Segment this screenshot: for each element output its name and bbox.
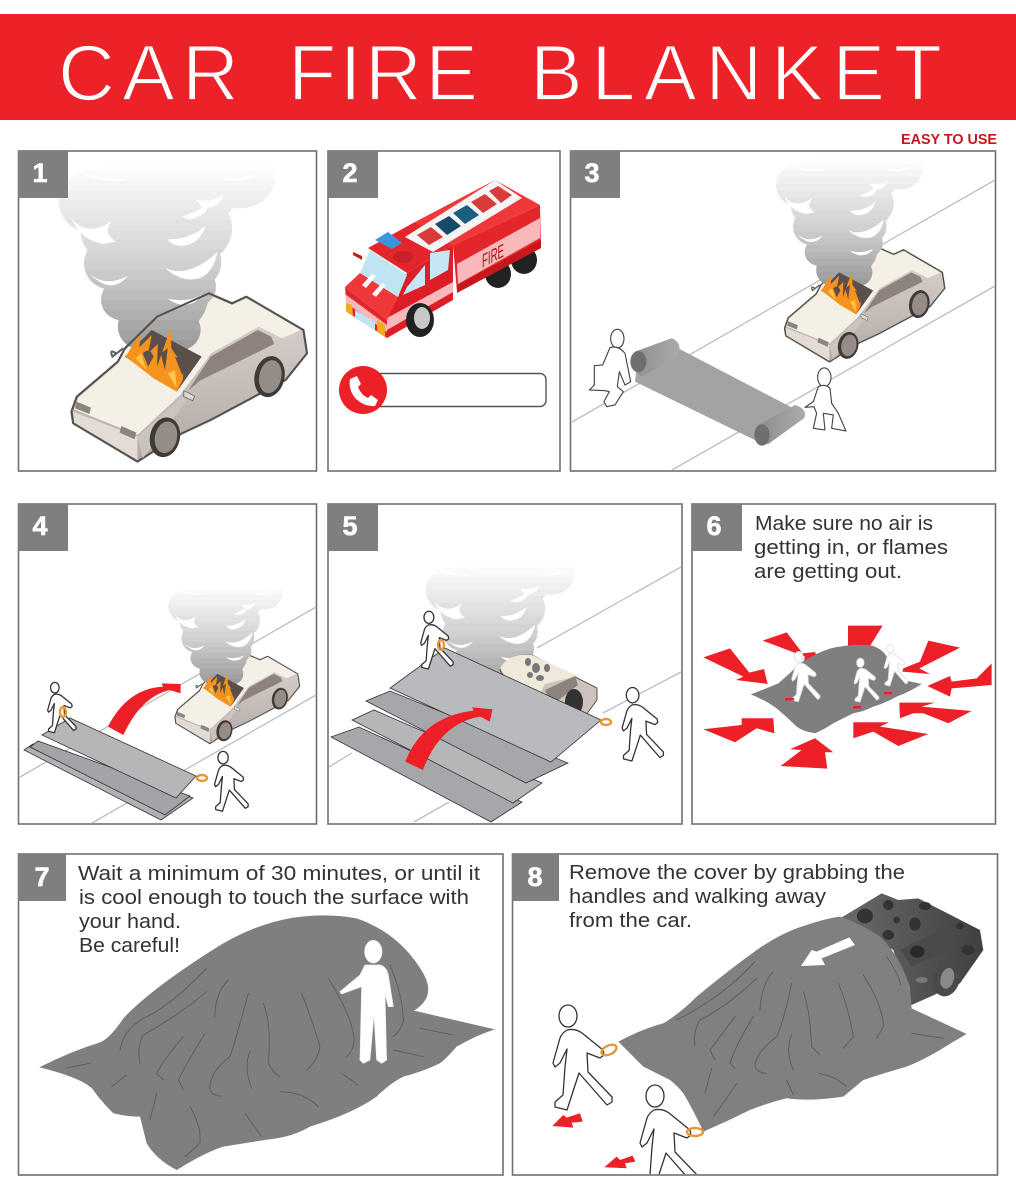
walker right — [622, 688, 663, 761]
white direction arrow — [801, 937, 855, 966]
person touching blanket — [340, 940, 393, 1063]
badge 6: 6 — [706, 511, 722, 541]
badge 3 — [570, 151, 620, 198]
instruction text — [78, 863, 480, 957]
folded blanket — [24, 718, 196, 820]
badge 2 — [328, 151, 378, 198]
unfolding blanket — [331, 648, 601, 822]
instruction text — [754, 513, 948, 583]
panel 2: call fire service — [328, 151, 560, 471]
badge 5: 5 — [342, 511, 358, 541]
instruction text: Be careful! — [79, 935, 180, 957]
road — [572, 180, 995, 470]
blanket folds — [677, 957, 943, 1117]
badge 1: 1 — [32, 158, 48, 188]
smoke and car — [36, 160, 307, 462]
title: CAR — [58, 28, 239, 117]
badge 2: 2 — [342, 158, 358, 188]
walker 1 — [553, 1005, 612, 1110]
red arrow — [108, 683, 181, 735]
people on blanket — [792, 644, 908, 702]
burnt car — [840, 893, 983, 1005]
badge 7: 7 — [34, 862, 50, 892]
badge 8: 8 — [527, 862, 543, 892]
badge 8 — [512, 854, 559, 901]
badge 4 — [18, 504, 68, 551]
instruction text — [569, 862, 905, 932]
panel 5: covering the car — [328, 504, 682, 824]
road — [20, 607, 316, 823]
red foot markers — [785, 692, 892, 708]
kneeling person right — [805, 368, 846, 431]
red arrow — [405, 707, 492, 770]
instruction text: is cool enough to touch the surface with — [79, 887, 469, 909]
truck lettering: FIRE — [482, 240, 504, 273]
covered car — [39, 915, 495, 1170]
badge 6 — [692, 504, 742, 551]
blanket roll — [630, 338, 805, 446]
covered car — [751, 645, 922, 733]
instruction text: your hand. — [79, 911, 181, 933]
kneeling person left — [589, 329, 631, 407]
phone number field — [339, 366, 546, 414]
instruction text: Wait a minimum of 30 minutes, or until it — [78, 863, 480, 885]
fire truck — [345, 180, 541, 338]
walker left — [421, 611, 453, 669]
title — [58, 28, 942, 117]
panel 6: sealing the edges — [692, 504, 996, 824]
easy to use label: EASY TO USE — [901, 132, 997, 148]
panel 7: wait and cool — [18, 854, 503, 1175]
ladder — [405, 180, 522, 252]
badge 3: 3 — [584, 158, 600, 188]
road — [329, 567, 681, 822]
handles — [600, 1043, 703, 1136]
walker left — [48, 682, 76, 733]
panel 3: unrolling the blanket — [570, 151, 996, 471]
red arrows — [552, 1113, 635, 1168]
handles — [438, 640, 611, 725]
panel 4: carrying the blanket — [18, 504, 316, 824]
header banner — [0, 14, 1016, 120]
blanket being pulled — [618, 917, 967, 1132]
instruction text: from the car. — [569, 910, 692, 932]
smoke and burnt car — [410, 561, 597, 730]
panel 1: burning car — [18, 151, 316, 471]
title: FIRE — [288, 28, 478, 117]
walker right — [215, 751, 248, 811]
red arrows pointing inward — [703, 626, 992, 769]
instruction text: are getting out. — [754, 561, 902, 583]
blanket folds — [65, 965, 453, 1157]
instruction text: Make sure no air is — [755, 513, 933, 535]
burning car small — [760, 157, 945, 362]
panel 8: removing the cover — [512, 854, 998, 1190]
badge 5 — [328, 504, 378, 551]
instruction text: getting in, or flames — [754, 537, 948, 559]
handles — [60, 707, 207, 781]
instruction text: handles and walking away — [569, 886, 826, 908]
burning car small — [156, 584, 300, 744]
badge 1 — [18, 151, 68, 198]
title: BLANKET — [530, 28, 942, 117]
walker 2 — [639, 1084, 697, 1174]
instruction text: Remove the cover by grabbing the — [569, 862, 905, 884]
badge 4: 4 — [32, 511, 48, 541]
badge 7 — [18, 854, 66, 901]
